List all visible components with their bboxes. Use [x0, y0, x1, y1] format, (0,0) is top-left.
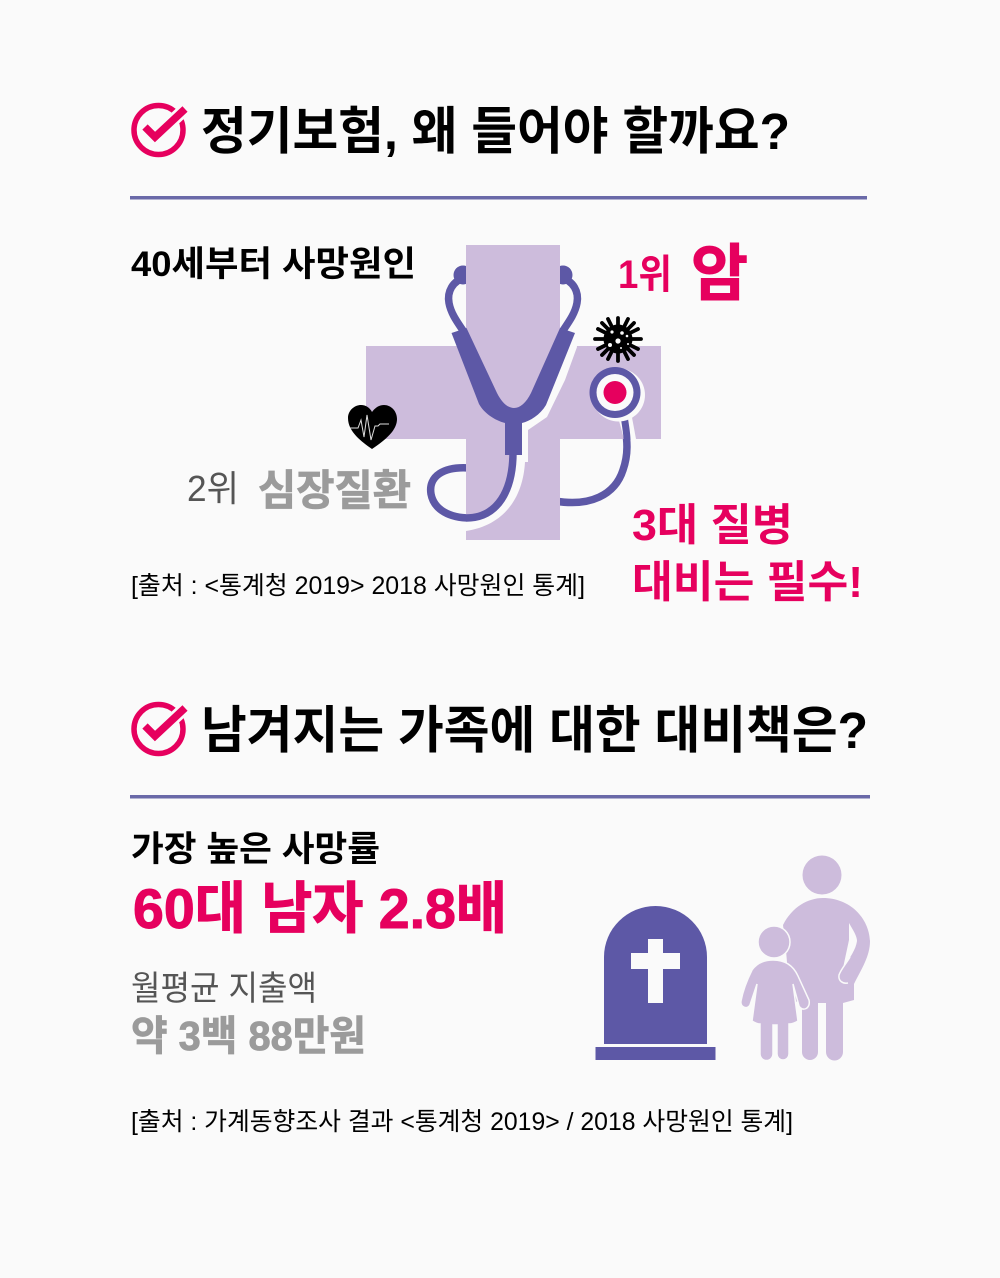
stat: men in their 60s 2.8 times: 60대 남자 2.8배 [133, 877, 507, 940]
divider line 1 [130, 196, 867, 200]
divider line 2 [130, 795, 870, 798]
icon: gravestone [596, 906, 716, 1060]
illustration: medical cross and stethoscope [366, 245, 661, 540]
adult figure [783, 856, 870, 1060]
label: rank 1 cancer: 암 [691, 240, 748, 309]
label: rank 2 heart disease [187, 467, 411, 514]
text: highest death rate: 가장 높은 사망률 [131, 830, 380, 869]
medical cross [366, 245, 661, 540]
icon: check circle [134, 704, 185, 754]
heading: section 1: 정기보험, 왜 들어야 할까요? [201, 103, 790, 160]
label: rank 2 heart disease: 2위 [187, 468, 239, 509]
icon: virus [595, 318, 641, 361]
callout: three major diseases [632, 501, 863, 607]
label: rank 2 heart disease: 심장질환 [258, 467, 411, 514]
chest piece [590, 367, 645, 422]
source note 1: [출처 : <통계청 2019> 2018 사망원인 통계] [131, 572, 585, 600]
child figure [741, 926, 809, 1060]
label: rank 1 cancer [618, 240, 748, 309]
stethoscope [452, 328, 627, 518]
icon: check circle [134, 106, 185, 154]
stat: about 3.88 million won: 약 3백 88만원 [131, 1013, 366, 1059]
text: monthly average spending: 월평균 지출액 [131, 970, 317, 1008]
panel: why term insurance [130, 103, 867, 607]
source note 2: [출처 : 가계동향조사 결과 <통계청 2019> / 2018 사망원인 통계] [131, 1108, 793, 1136]
icon: parent and child [741, 856, 870, 1060]
panel: family preparation [130, 702, 870, 1136]
label: rank 1 cancer: 1위 [618, 253, 672, 297]
callout: three major diseases: 3대 질병 [632, 501, 793, 550]
icon: heart with pulse [348, 405, 397, 449]
heading: section 2: 남겨지는 가족에 대한 대비책은? [201, 702, 868, 759]
callout: three major diseases: 대비는 필수! [632, 558, 863, 607]
text: from age 40 cause of death: 40세부터 사망원인 [131, 245, 416, 284]
